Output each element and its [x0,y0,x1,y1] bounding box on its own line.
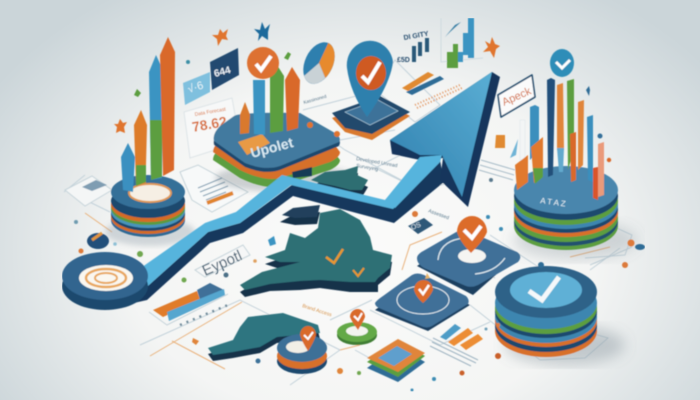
main UK map [240,205,392,297]
small caption text: Developed Unread [356,156,398,169]
small orange and blue strips chart [402,72,462,108]
striped card with orange bar [180,165,248,212]
stats card 78.62: 78.62 [191,113,228,135]
apeck callout: Apeck [500,85,534,109]
left top chart card [65,176,112,206]
grey small label tag [408,218,433,234]
floating stars and dots top left [114,22,291,149]
small shapes beside right chart [479,86,611,182]
small caption text: Surveying [356,163,379,173]
top center platform with update label [213,47,355,192]
small text bottom left: Brand Access [301,303,333,319]
orange and blue bars panel [149,283,228,325]
orange check circle [247,47,279,79]
left stacked disc with rising arrows [105,37,195,246]
apeck callout [498,75,535,117]
orange star top right [483,37,500,58]
target on left disc [129,184,171,202]
thin connector lines and cards [64,60,632,385]
orange and green arrow [134,110,147,186]
orange calculator icon [367,339,425,382]
map platform with orange pin [417,216,520,295]
lower map [208,313,320,361]
stripes legend [430,324,483,366]
map check marks [326,249,343,263]
value badge: 644 [213,65,232,80]
infographic scene [62,18,645,392]
green ring with pin [337,309,377,345]
growth bars panel [441,18,483,68]
orange connector lines [85,213,610,369]
top right check badge [550,49,574,77]
tall blue green arrow [149,55,163,180]
small disc [87,233,109,249]
target ring start of arrow [62,252,148,310]
small bar chart top: £5D [397,57,410,64]
arrow head [390,72,500,207]
small caption text: Assessed [427,208,450,221]
export label: Eypotl [200,247,245,280]
value badge: √·6 [186,80,205,96]
lower right stacked disc with check [495,266,625,365]
upper map piece [292,166,368,197]
top right stacked disc with bars [513,78,637,260]
blue location pin with base [332,41,410,140]
stats card 78.62: Data Forecast [194,107,227,118]
small caption text [303,94,450,221]
bottom small stack with pin [277,326,327,374]
scattered dots [74,211,645,392]
short blue arrow [121,143,135,192]
right bars [520,120,525,160]
stats card 78.62 [184,98,240,158]
value badge [183,48,239,105]
main rising trend arrow [125,72,500,305]
top center platform with update label: Upolet [249,134,295,161]
map platform with small pin [375,273,470,331]
small bar chart top: DI GITY [403,31,430,42]
small caption text: Kassinoned [303,94,327,105]
center bars [253,80,265,135]
grey small label tag: OS [410,221,422,232]
top right stacked disc with bars: A T A Z [540,196,566,209]
pie chart icon [297,37,341,89]
tall orange arrow [160,37,175,176]
small bar chart top [397,31,430,64]
